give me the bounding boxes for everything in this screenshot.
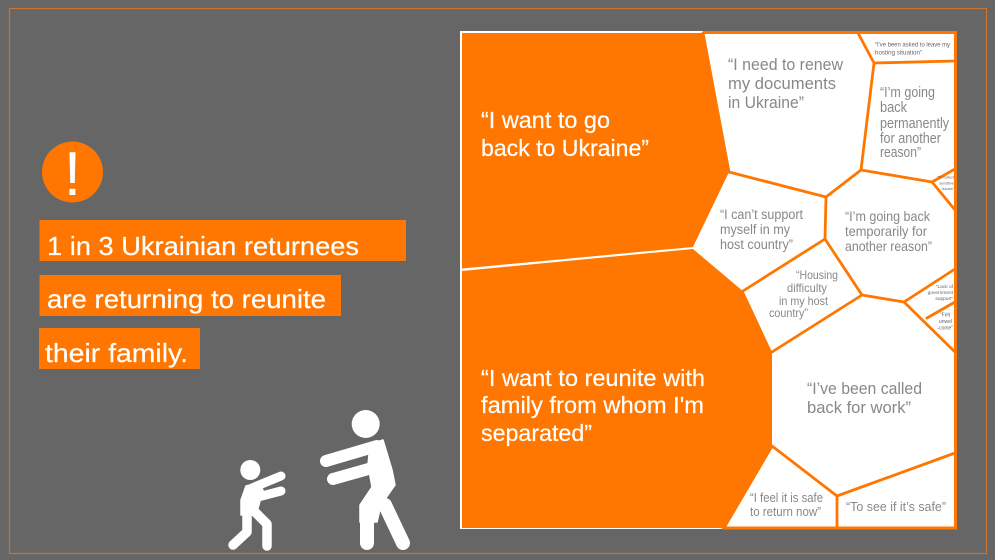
cell: called back for work: “I’ve been called <box>807 379 922 398</box>
callout: key finding: their family. <box>45 338 188 368</box>
cell: going back permanently: reason” <box>880 145 921 161</box>
cell: lack of government support: support” <box>935 296 953 302</box>
cell: renew documents: my documents <box>728 74 836 93</box>
callout: key finding: are returning to reunite <box>47 284 326 314</box>
cell: I want to reunite with family: family from whom I'm <box>481 392 704 418</box>
cell: lack of government support: “Lack of <box>936 284 954 290</box>
cell: smallest reason: sensitive <box>939 182 954 186</box>
cell: housing difficulty: in my host <box>779 294 829 308</box>
cell: going back permanently: back <box>880 100 908 116</box>
cell: renew documents: “I need to renew <box>728 55 844 74</box>
icon: adult with arms out <box>326 410 403 543</box>
cell: I want to reunite with family <box>462 249 772 528</box>
cell: going back temporarily: “I’m going back <box>845 208 931 224</box>
cell: housing difficulty: difficulty <box>787 281 827 295</box>
cell: felt unwelcome: -come” <box>937 326 953 332</box>
cell: can't support myself: host country” <box>720 237 793 252</box>
cell: I want to go back to Ukraine: “I want to go <box>481 107 610 133</box>
icon: child running <box>233 460 281 546</box>
cell: can't support myself: myself in my <box>720 222 790 237</box>
cell: going back permanently: “I’m going <box>880 85 935 101</box>
cell: asked to leave hosting situation: hosting situation” <box>875 50 922 56</box>
cell: going back temporarily: temporarily for <box>845 223 927 239</box>
cell: I want to reunite with family: separated” <box>481 420 592 446</box>
chart: voronoi treemap of return reasons <box>460 31 956 529</box>
cell: going back permanently: for another <box>880 131 941 147</box>
cell: housing difficulty: country” <box>769 306 808 320</box>
cell: felt unwelcome: “Felt <box>940 312 951 318</box>
cell: smallest reason: issues” <box>942 187 955 191</box>
cell: safe to return now: to return now” <box>750 505 821 519</box>
cell: going back temporarily: another reason” <box>845 238 932 254</box>
cell: safe to return now: “I feel it is safe <box>750 491 823 505</box>
callout: key finding: 1 in 3 Ukrainian returnees <box>47 231 359 261</box>
cell: to see if it's safe: “To see if it’s safe” <box>846 499 946 514</box>
cell: I want to go back to Ukraine <box>462 33 729 268</box>
callout: key finding <box>39 220 406 369</box>
cell: housing difficulty: “Housing <box>796 268 838 282</box>
cell: renew documents: in Ukraine” <box>728 93 804 112</box>
cell: called back for work: back for work” <box>807 398 911 417</box>
cell: smallest reason: “To collect <box>937 176 955 180</box>
cell: I want to go back to Ukraine: back to Ukraine” <box>481 135 649 161</box>
icon: exclamation mark: ! <box>64 140 81 209</box>
cell: felt unwelcome: unwel <box>939 319 952 325</box>
cell: lack of government support: government <box>928 290 954 296</box>
cell: going back permanently: permanently <box>880 116 950 132</box>
cell: I want to reunite with family: “I want to reunite with <box>481 365 705 391</box>
cell: can't support myself: “I can’t support <box>720 207 803 222</box>
icon: exclamation mark <box>42 140 103 209</box>
cell: asked to leave hosting situation: “I've been asked to leave my <box>875 42 950 48</box>
